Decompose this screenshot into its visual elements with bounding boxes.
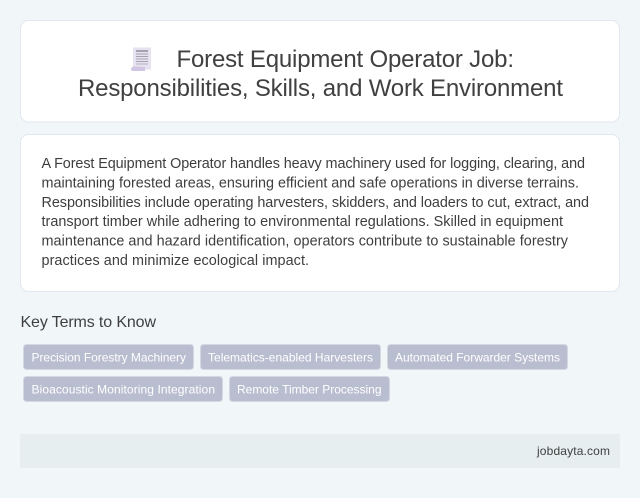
title: Responsibilities, Skills, and Work Environment <box>78 75 563 102</box>
icon: document scroll <box>131 48 151 71</box>
tag: telematics-enabled harvesters: Telematics-enabled Harvesters <box>208 350 373 364</box>
title: Forest Equipment Operator Job: <box>176 46 514 73</box>
tag: precision forestry machinery: Precision Forestry Machinery <box>32 350 186 364</box>
tag: bioacoustic monitoring integration: Bioacoustic Monitoring Integration <box>32 382 215 396</box>
text block: description <box>42 156 589 269</box>
footer: site name: jobdayta.com <box>536 444 610 458</box>
footer <box>20 434 620 468</box>
text block: description: maintenance and hazard identification, operators contribute to sustainable forestry <box>42 234 569 250</box>
panel: key term tags <box>24 344 568 402</box>
tag: precision forestry machinery <box>24 344 194 370</box>
tag: remote timber processing: Remote Timber Processing <box>237 382 382 396</box>
panel: title card <box>20 20 620 122</box>
text block: description: practices and minimize ecological impact. <box>42 253 309 269</box>
text block: description: A Forest Equipment Operator handles heavy machinery used for logging, clearing, and <box>42 156 585 172</box>
tag: telematics-enabled harvesters <box>200 344 380 370</box>
tag: bioacoustic monitoring integration <box>24 376 222 402</box>
heading: key terms: Key Terms to Know <box>20 314 156 331</box>
tag: remote timber processing <box>230 376 390 402</box>
text block: description: maintaining forested areas, ensuring efficient and safe operations in diverse terrains. <box>42 175 579 191</box>
panel: description card <box>20 134 620 292</box>
title <box>78 46 563 102</box>
text block: description: Responsibilities include operating harvesters, skidders, and loaders to cut, extract, and <box>42 195 589 211</box>
text block: description: transport timber while adhering to environmental regulations. Skilled in equipment <box>42 214 563 230</box>
tag: automated forwarder systems <box>388 344 568 370</box>
tag: automated forwarder systems: Automated Forwarder Systems <box>395 350 560 364</box>
